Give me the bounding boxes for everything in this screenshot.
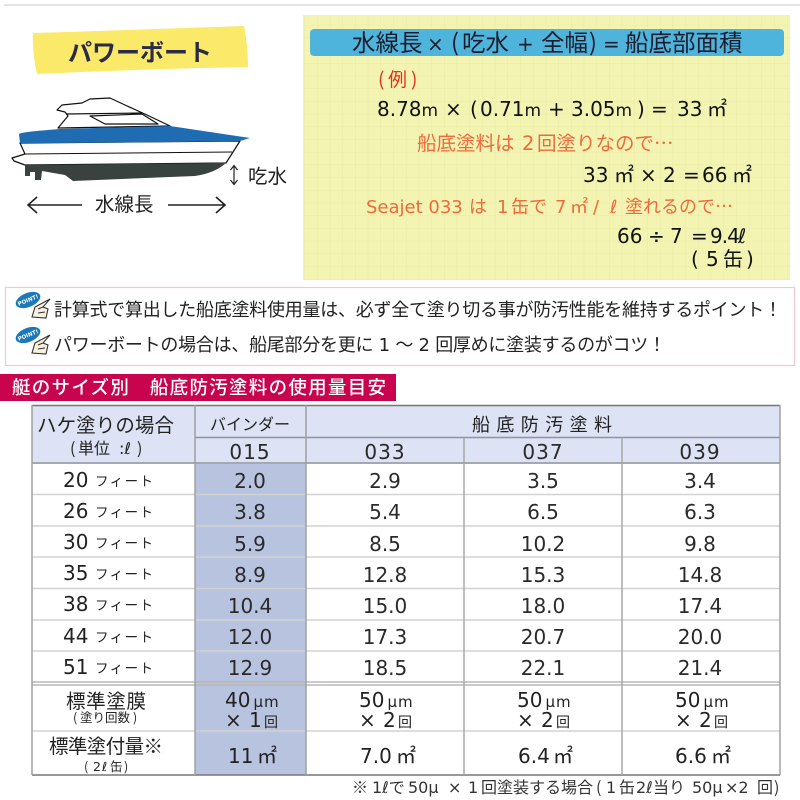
formula heading: 船底部面積 xyxy=(625,24,742,58)
table header: 037 xyxy=(522,440,564,464)
row: 20 feet xyxy=(63,468,716,493)
row: 26 feet: 3.8 xyxy=(234,500,266,524)
calculation: two coats: 2 xyxy=(663,163,676,187)
row: standard coverage: 11 xyxy=(228,744,253,768)
footnote: 50µ xyxy=(692,778,723,797)
calculation: litres: 7 xyxy=(670,224,683,248)
calculation: litres: 66 xyxy=(617,224,642,248)
note: two coats: は xyxy=(495,127,515,156)
calculation: area: ㎡ xyxy=(707,97,727,121)
icon: point badge 2 xyxy=(13,324,50,354)
footnote: 当り xyxy=(653,774,685,798)
footnote: ×2 xyxy=(725,778,749,797)
note: two coats: 2 xyxy=(522,132,534,155)
footnote: 回 xyxy=(757,774,773,798)
calculation: area: m xyxy=(616,101,632,121)
footnote: 1 xyxy=(606,778,616,797)
note: coverage per can: Seajet 033 xyxy=(366,197,463,218)
row: 44 feet: 20.7 xyxy=(521,625,565,649)
formula heading: × xyxy=(427,32,444,56)
table header: ハケ塗りの場合 xyxy=(37,409,174,438)
calculation: two coats: 66 xyxy=(702,163,727,187)
footnote: 1ℓ xyxy=(372,778,389,797)
row: standard film thickness: × xyxy=(517,708,534,732)
row: standard film thickness: 1 xyxy=(249,708,262,732)
note: coverage per can: 塗れるので… xyxy=(625,193,733,219)
icon: point badge 1: POINT! xyxy=(17,294,40,308)
row: 35 feet: 8.9 xyxy=(234,563,266,587)
calculation: two coats: = xyxy=(683,163,700,187)
formula heading xyxy=(310,24,784,58)
row: standard coverage: ㎡ xyxy=(257,744,277,768)
row: 35 feet: 12.8 xyxy=(363,563,407,587)
calculation: area: ( xyxy=(470,97,478,121)
row: 30 feet xyxy=(63,530,716,556)
formula heading: = xyxy=(603,32,620,56)
footnote: 1 xyxy=(468,778,478,797)
formula heading: 吃水 xyxy=(462,24,509,58)
row: 44 feet xyxy=(63,624,722,649)
label: 吃水: 吃水 xyxy=(248,160,287,189)
note: two coats: 船底塗料 xyxy=(417,127,495,156)
row: 35 feet: 35 xyxy=(63,561,88,585)
calculation: area: m xyxy=(525,101,541,121)
table header: バインダー xyxy=(210,411,290,435)
formula heading: 全幅 xyxy=(541,24,588,58)
note: coverage per can: 缶で xyxy=(511,193,547,219)
row: standard coverage: ℓ xyxy=(101,759,107,774)
row: 44 feet: 12.0 xyxy=(228,625,272,649)
row: standard coverage: ㎡ xyxy=(711,744,731,768)
row: standard film thickness: 回 xyxy=(398,712,412,732)
row: standard film thickness: × xyxy=(225,708,242,732)
icon: power boat illustration xyxy=(12,98,250,181)
calculation: litres: = xyxy=(691,224,708,248)
footnote: × xyxy=(448,778,461,797)
arrow: waterline length left xyxy=(28,197,82,213)
row: standard coverage xyxy=(49,730,731,775)
icon: point badge 2: POINT! xyxy=(17,329,40,343)
row: 26 feet: 5.4 xyxy=(369,500,401,524)
arrow: draft xyxy=(230,166,238,184)
footnote: 2ℓ xyxy=(636,778,653,797)
row: 35 feet: フィート xyxy=(95,563,153,583)
table header: ( xyxy=(70,435,75,459)
binder column shading xyxy=(195,463,306,775)
calculation: two coats: ㎡ xyxy=(614,163,634,187)
row: standard film thickness: ( xyxy=(73,707,77,726)
note: coverage per can: 1 xyxy=(497,197,508,218)
row: 20 feet: 20 xyxy=(63,468,88,492)
row: 51 feet: フィート xyxy=(95,657,153,677)
panel: formula xyxy=(303,15,790,280)
row: 44 feet: 17.3 xyxy=(363,625,407,649)
row: standard film thickness: 2 xyxy=(383,708,396,732)
row: standard film thickness: µm xyxy=(387,693,414,711)
row: 30 feet: 30 xyxy=(63,530,88,554)
table header: :ℓ xyxy=(119,439,131,458)
footnote: 50µ xyxy=(408,778,439,797)
footnote: ) xyxy=(774,774,779,798)
heading: パワーボート note xyxy=(33,26,248,74)
example label: (例) xyxy=(378,65,417,92)
row: 20 feet: 2.0 xyxy=(234,469,266,493)
row: 20 feet: 3.5 xyxy=(527,469,559,493)
footnote: 回塗装する場合 xyxy=(481,774,593,798)
row: 30 feet: 5.9 xyxy=(234,532,266,556)
row: standard film thickness: × xyxy=(675,708,692,732)
heading: table title bar: 艇のサイズ別 船底防汚塗料の使用量目安 xyxy=(12,374,386,400)
row: 38 feet xyxy=(63,592,722,618)
row: 26 feet: フィート xyxy=(95,501,153,521)
row: standard film thickness: 50 xyxy=(675,688,700,712)
row: standard film thickness: 回 xyxy=(264,712,278,732)
calculation: two coats: ㎡ xyxy=(732,163,752,187)
calculation: area: × xyxy=(445,97,462,121)
panel: points xyxy=(6,288,794,366)
table header: 船底防汚塗料 xyxy=(472,411,612,437)
row: 51 feet: 21.4 xyxy=(678,656,722,680)
row: standard coverage: 6.6 xyxy=(675,744,707,768)
row: 35 feet xyxy=(63,561,722,587)
note: coverage per can: 7 xyxy=(555,197,566,218)
row: standard coverage: 缶 xyxy=(110,756,123,775)
point text 1: 計算式で算出した船底塗料使用量は、必ず全て塗り切る事が防汚性能を維持するポイント！ xyxy=(54,300,782,321)
row: 38 feet: 15.0 xyxy=(363,594,407,618)
row: 44 feet: 44 xyxy=(63,624,88,648)
row: standard film thickness: 塗り回数 xyxy=(80,707,131,726)
note: coverage per can: ℓ xyxy=(609,197,617,218)
table header: 015 xyxy=(229,440,271,464)
arrow: waterline length right xyxy=(168,197,225,213)
note: two coats: 回塗りなので… xyxy=(537,127,674,156)
calculation: cans: ) xyxy=(746,247,754,271)
note: coverage per can: / xyxy=(593,197,600,218)
row: 30 feet: 10.2 xyxy=(521,532,565,556)
calculation: cans: ( xyxy=(691,247,699,271)
formula heading: ( xyxy=(451,24,459,58)
row: 20 feet: フィート xyxy=(95,470,153,490)
formula heading: ) xyxy=(589,24,597,58)
row: 26 feet: 6.5 xyxy=(527,500,559,524)
footnote: で xyxy=(389,774,405,798)
row: 51 feet: 22.1 xyxy=(521,656,565,680)
row: standard film thickness: 50 xyxy=(517,688,542,712)
calculation: litres: ÷ xyxy=(648,224,665,248)
row: 30 feet: フィート xyxy=(95,532,153,552)
calculation: cans: 5 xyxy=(706,247,719,271)
row: standard film thickness: µm xyxy=(545,693,572,711)
calculation: area: ) xyxy=(637,97,645,121)
row: standard film thickness: × xyxy=(359,708,376,732)
row: 38 feet: フィート xyxy=(95,594,153,614)
point text 2: パワーボートの場合は、船尾部分を更に 1 ～ 2 回厚めに塗装するのがコツ！ xyxy=(54,335,666,356)
row: standard film thickness: 2 xyxy=(541,708,554,732)
icon: point badge 1 xyxy=(13,289,50,318)
row: 44 feet: フィート xyxy=(95,626,153,646)
footnote: ※ xyxy=(352,774,368,798)
formula heading: 水線長 xyxy=(352,24,422,58)
row: standard coverage: ㎡ xyxy=(553,744,573,768)
row: 44 feet: 20.0 xyxy=(678,625,722,649)
calculation: cans: 缶 xyxy=(723,243,743,272)
calculation: two coats: 33 xyxy=(583,163,608,187)
calculation: area: 33 xyxy=(677,97,702,121)
row: 26 feet: 6.3 xyxy=(684,500,716,524)
row: standard film thickness: µm xyxy=(703,693,730,711)
row: standard film thickness: 50 xyxy=(359,688,384,712)
row: 38 feet: 18.0 xyxy=(521,594,565,618)
note: coverage per can: ㎡ xyxy=(570,196,588,218)
table header: 033 xyxy=(364,440,406,464)
note: coverage per can: は xyxy=(469,193,487,219)
row: standard coverage: 6.4 xyxy=(518,744,550,768)
calculation: area: m xyxy=(422,101,438,121)
row: standard coverage: ( xyxy=(84,756,88,775)
header shading xyxy=(32,405,780,463)
table header: 039 xyxy=(679,440,721,464)
formula heading: + xyxy=(517,32,534,56)
row: 38 feet: 38 xyxy=(63,592,88,616)
row: standard film thickness: µm xyxy=(253,693,280,711)
table header: 単位 xyxy=(78,435,110,459)
row: 20 feet: 2.9 xyxy=(369,469,401,493)
calculation: area: = xyxy=(651,97,668,121)
row: standard film thickness: ) xyxy=(133,707,137,726)
calculation: area: 8.78 xyxy=(377,97,422,121)
row: standard coverage: 2 xyxy=(93,759,101,774)
row: 20 feet: 3.4 xyxy=(684,469,716,493)
row: 26 feet xyxy=(63,499,716,524)
row: 51 feet: 18.5 xyxy=(363,656,407,680)
row: standard film thickness: 標準塗膜 xyxy=(66,685,146,714)
row: 26 feet: 26 xyxy=(63,499,88,523)
row: standard film thickness: 回 xyxy=(714,712,728,732)
row: standard film thickness: 2 xyxy=(699,708,712,732)
footnote: ( xyxy=(596,774,601,798)
row: standard coverage: 標準塗付量※ xyxy=(49,730,163,759)
table header: ) xyxy=(137,435,142,459)
calculation: two coats: × xyxy=(640,163,657,187)
calculation: area: + xyxy=(548,97,565,121)
calculation: area: 3.05 xyxy=(571,97,616,121)
row: 38 feet: 10.4 xyxy=(228,594,272,618)
row: standard film thickness: 40 xyxy=(225,688,250,712)
heading: パワーボート note: パワーボート xyxy=(68,33,212,68)
row: 35 feet: 15.3 xyxy=(521,563,565,587)
row: standard coverage: 7.0 xyxy=(360,744,392,768)
row: 30 feet: 8.5 xyxy=(369,532,401,556)
row: standard coverage: ) xyxy=(124,756,128,775)
calculation: area: 0.71 xyxy=(480,97,525,121)
calculation: litres: 9.4 xyxy=(710,224,739,248)
row: 38 feet: 17.4 xyxy=(678,594,722,618)
row: 35 feet: 14.8 xyxy=(678,563,722,587)
row: standard film thickness xyxy=(66,685,730,732)
row: standard coverage: ㎡ xyxy=(396,744,416,768)
row: 51 feet: 51 xyxy=(63,655,88,679)
table header xyxy=(37,409,721,464)
row: standard film thickness: 回 xyxy=(556,712,570,732)
row: 51 feet xyxy=(63,655,722,680)
row: 30 feet: 9.8 xyxy=(684,532,716,556)
row: 51 feet: 12.9 xyxy=(228,656,272,680)
calculation: litres: ℓ xyxy=(737,224,746,248)
label: 水線長: 水線長 xyxy=(95,188,154,217)
table: usage by boat size xyxy=(32,405,780,775)
footnote: 缶 xyxy=(619,774,635,798)
